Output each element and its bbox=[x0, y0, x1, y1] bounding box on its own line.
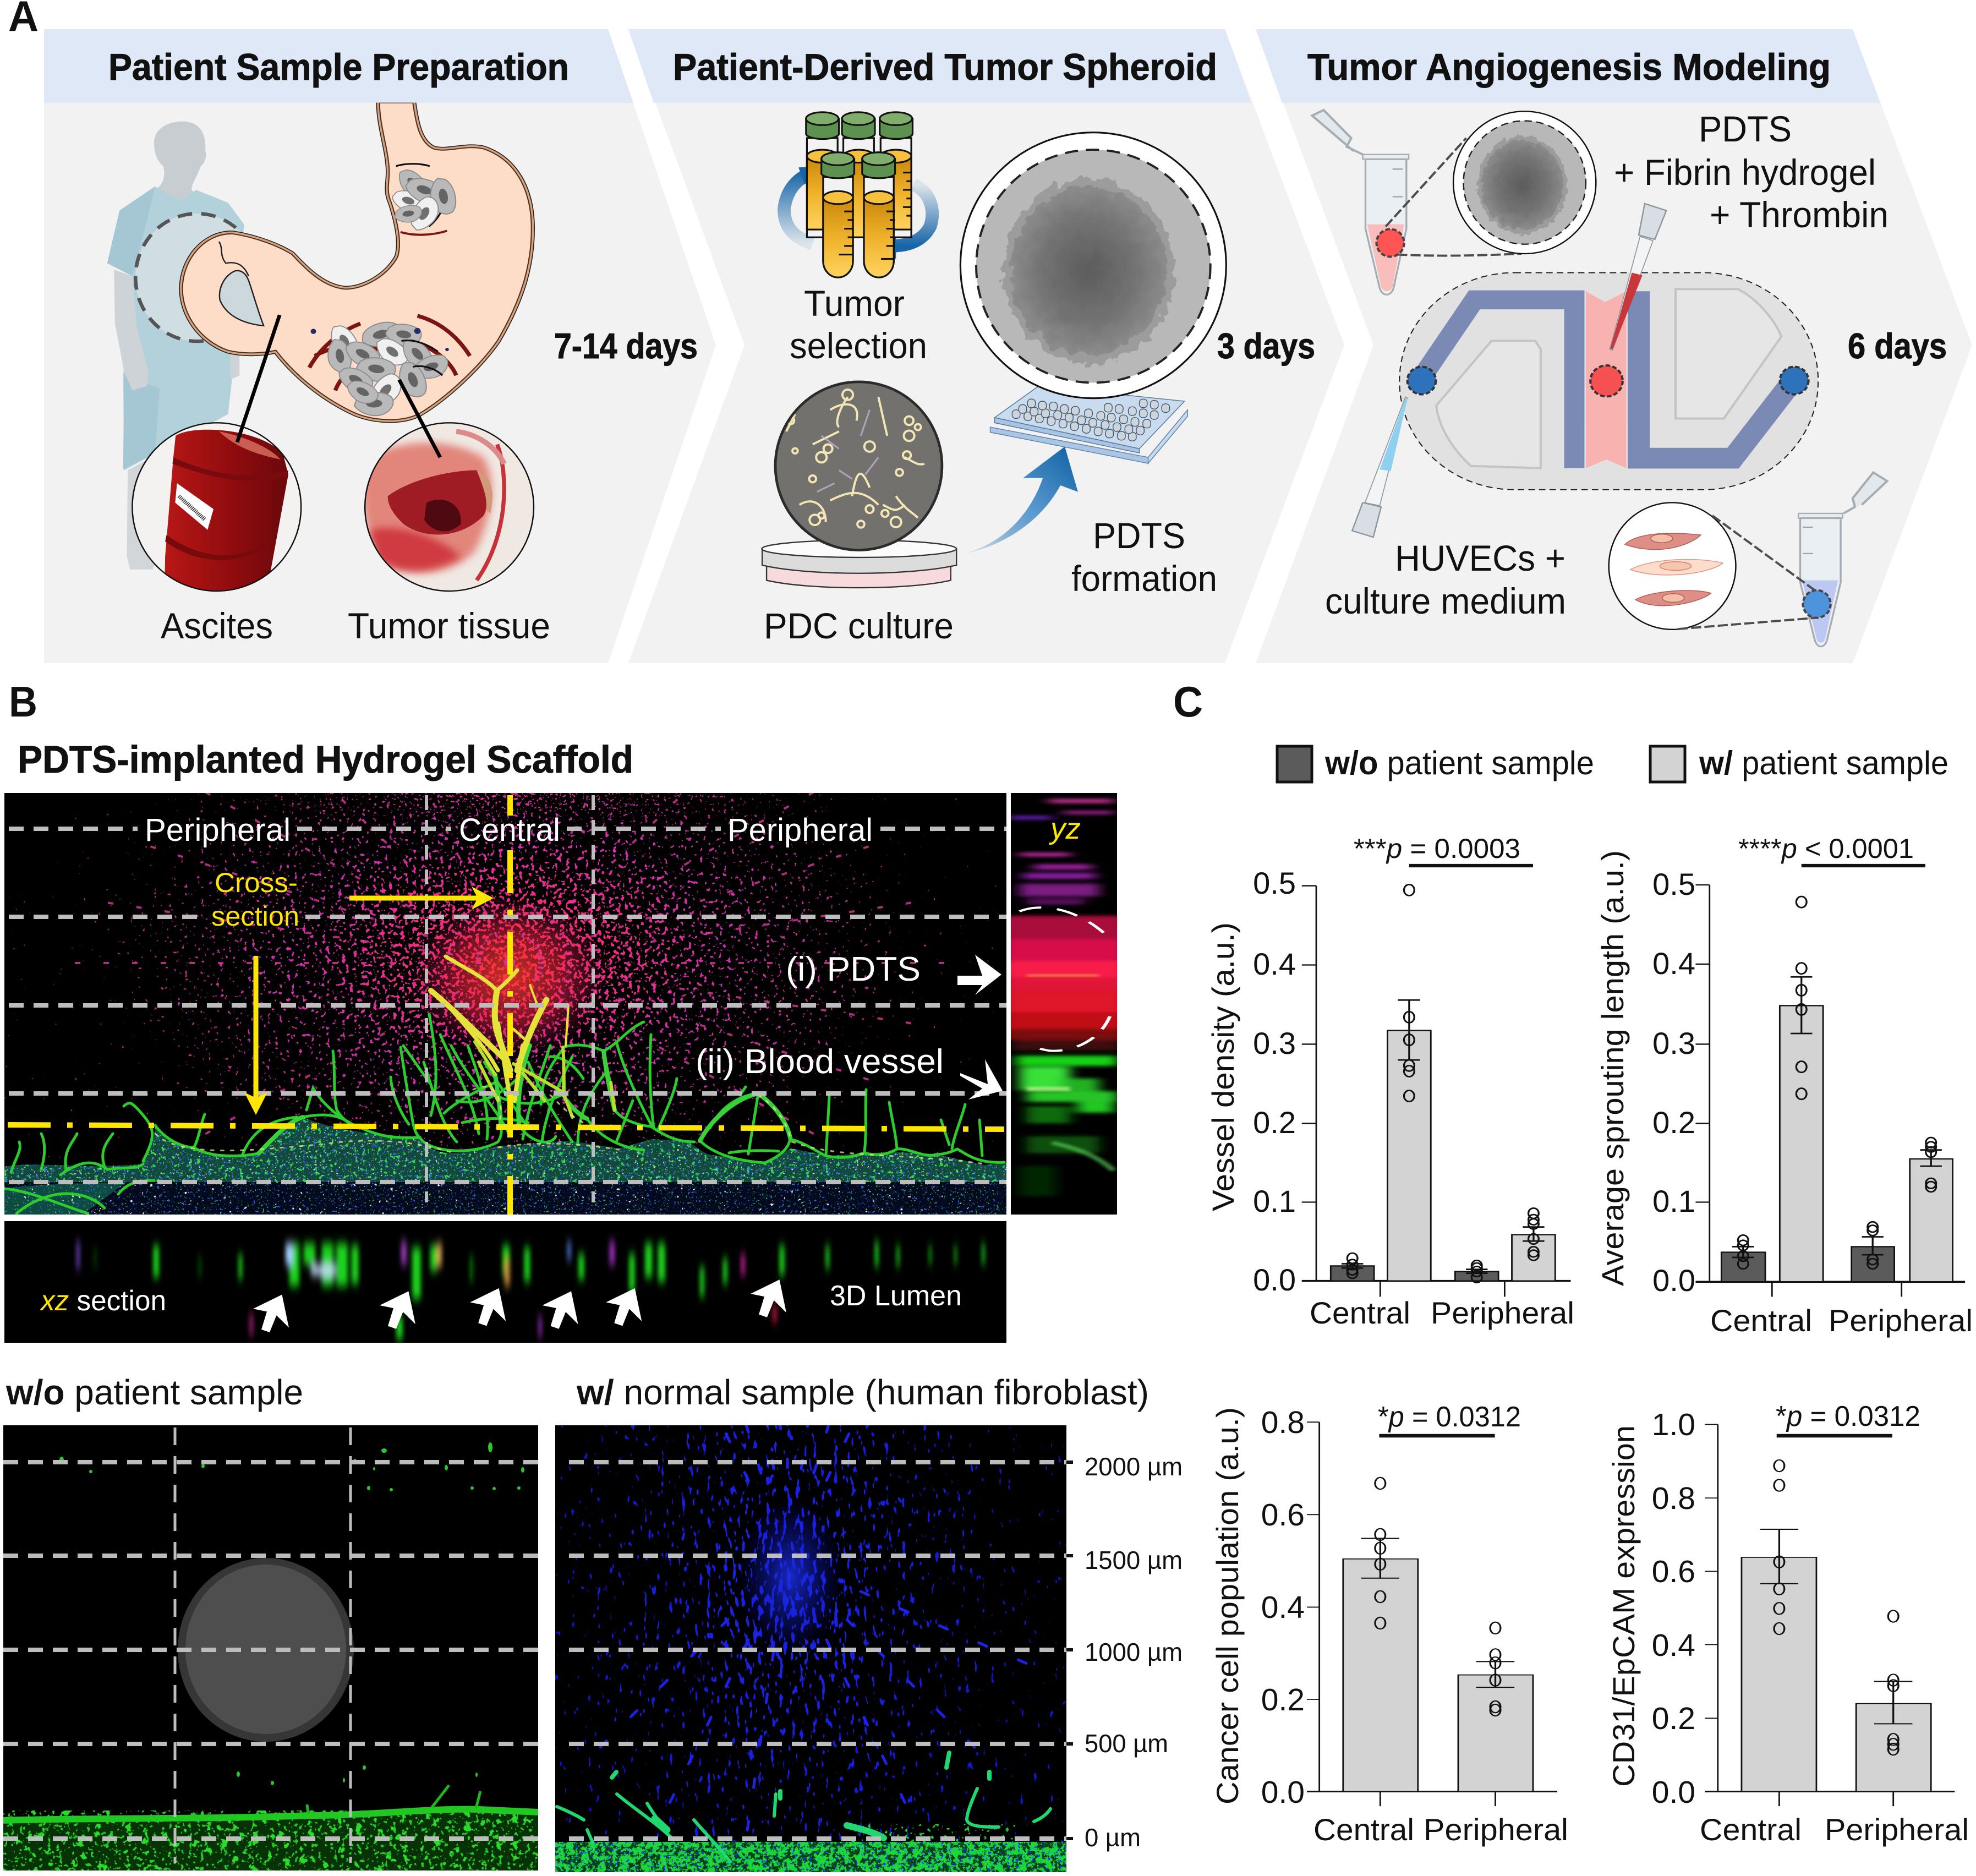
y axis tick labels: 0.6 bbox=[1652, 1554, 1695, 1589]
x labels: Peripheral bbox=[1431, 1295, 1574, 1330]
header band 2 bbox=[628, 29, 1251, 103]
legend swatch: w/o bbox=[1277, 746, 1312, 782]
callout line to tumor tissue bbox=[399, 380, 440, 457]
micrograph: main hydrogel scaffold bbox=[4, 724, 1006, 1215]
x labels: Central bbox=[1710, 1303, 1812, 1338]
y axis tick labels: 0.4 bbox=[1652, 1628, 1695, 1663]
label: formation: formation bbox=[1071, 558, 1217, 599]
label: PDC culture: PDC culture bbox=[764, 605, 954, 646]
icon: 96-well plate bbox=[990, 386, 1187, 463]
label: PDTS: PDTS bbox=[1093, 515, 1185, 556]
label: Central: Central bbox=[459, 812, 560, 848]
y axis tick labels: 0.4 bbox=[1261, 1590, 1305, 1625]
y axis tick labels: 0.3 bbox=[1253, 1026, 1296, 1060]
label: Ascites: Ascites bbox=[161, 605, 273, 646]
y axis tick labels: 0.2 bbox=[1253, 1105, 1296, 1140]
arrow: PDC to PDTS formation bbox=[960, 446, 1078, 554]
spheroid micrograph in circle bbox=[960, 133, 1226, 398]
label: + Thrombin: + Thrombin bbox=[1710, 194, 1889, 235]
scale ticks bbox=[1066, 1462, 1073, 1839]
label: (i) PDTS: (i) PDTS bbox=[786, 950, 921, 988]
scale labels bbox=[1085, 1452, 1183, 1852]
label: 3D Lumen: 3D Lumen bbox=[830, 1280, 962, 1312]
callout line to ascites bbox=[237, 315, 280, 442]
illustration: spheroid steps bbox=[762, 112, 1226, 588]
micrograph: PDC culture bbox=[775, 382, 942, 550]
grid: gray dashed guide lines bbox=[9, 795, 1006, 1202]
illustration: patient and stomach bbox=[107, 103, 534, 604]
x labels: Central bbox=[1313, 1812, 1414, 1847]
icon: stomach bbox=[183, 103, 532, 420]
panel: Patient Sample Preparation bbox=[44, 29, 716, 663]
legend text: w/o patient sample: w/o patient sample bbox=[1324, 745, 1594, 781]
y axis tick labels: 0.3 bbox=[1652, 1026, 1695, 1060]
panel label C: C bbox=[1173, 677, 1203, 726]
photo: tumor tissue bbox=[362, 423, 534, 591]
legend text: w/ patient sample: w/ patient sample bbox=[1699, 745, 1948, 781]
label: section: section bbox=[211, 901, 299, 932]
chart: average sprouting length bbox=[1595, 833, 1973, 1338]
y axis tick labels: 0.5 bbox=[1253, 866, 1296, 900]
label: Cross-: Cross- bbox=[215, 867, 298, 898]
x labels bbox=[1310, 1295, 1574, 1330]
header band 1 bbox=[44, 29, 633, 103]
placeholder spheroid shape bbox=[178, 1558, 354, 1742]
label: + Fibrin hydrogel: + Fibrin hydrogel bbox=[1614, 152, 1876, 193]
y axis title: Cancer cell population (a.u.) bbox=[1210, 1407, 1245, 1804]
heading: w/ normal sample: w/ normal sample (human fibroblast) bbox=[576, 1372, 1149, 1412]
micrograph: without patient sample bbox=[3, 1425, 538, 1870]
arrow: yellow horizontal bbox=[349, 887, 494, 910]
heading: Patient Sample Preparation: Patient Sample Preparation bbox=[108, 46, 569, 88]
arrows: lumen markers bbox=[253, 1279, 786, 1332]
significance: *p = 0.0312 bbox=[1776, 1401, 1920, 1432]
dashed magnification circle on patient bbox=[135, 214, 259, 341]
green endothelial layer bbox=[3, 1785, 538, 1870]
y axis tick labels: 0.6 bbox=[1261, 1497, 1305, 1533]
label: (ii) Blood vessel: (ii) Blood vessel bbox=[696, 1043, 944, 1081]
duration: 7-14 days: 7-14 days bbox=[554, 326, 698, 366]
y axis tick labels: 0.1 bbox=[1253, 1184, 1296, 1218]
micrograph: with normal sample bbox=[555, 1252, 1066, 1872]
x labels: Peripheral bbox=[1424, 1812, 1568, 1847]
chart: cancer cell population bbox=[1210, 1401, 1568, 1847]
icon: HUVEC inset circle bbox=[1609, 502, 1736, 630]
icon: tumor selection tubes bbox=[784, 112, 932, 277]
arrow: yellow vertical bbox=[244, 956, 267, 1115]
illustration: chip assembly bbox=[1312, 110, 1887, 647]
y axis tick labels: 0.8 bbox=[1261, 1405, 1305, 1440]
label: Tumor tissue: Tumor tissue bbox=[348, 605, 550, 646]
y axis tick labels: 0.0 bbox=[1652, 1263, 1695, 1298]
y axis tick labels bbox=[1253, 866, 1296, 1297]
scale labels: 1000 µm bbox=[1085, 1638, 1183, 1666]
x labels: Central bbox=[1310, 1295, 1410, 1330]
icon: microfluidic chip bbox=[1399, 272, 1818, 490]
y axis tick labels: 0.0 bbox=[1253, 1262, 1296, 1297]
tumor cluster lower bbox=[309, 316, 470, 415]
arrow: white to PDTS bbox=[957, 955, 1001, 995]
label: xz section: xz section bbox=[39, 1285, 166, 1317]
x labels bbox=[1710, 1303, 1973, 1338]
scale labels: 0 µm bbox=[1085, 1823, 1141, 1852]
heading: Tumor Angiogenesis Modeling: Tumor Angiogenesis Modeling bbox=[1307, 46, 1831, 88]
panel: Tumor Angiogenesis Modeling bbox=[1256, 29, 1972, 663]
radial cell streaks bbox=[589, 1252, 1031, 1864]
y axis tick labels: 0.2 bbox=[1652, 1701, 1695, 1736]
significance: ***p = 0.0003 bbox=[1354, 833, 1520, 864]
cross-section guide lines bbox=[8, 795, 1004, 1215]
label: HUVECs +: HUVECs + bbox=[1395, 538, 1566, 578]
x labels: Peripheral bbox=[1825, 1812, 1969, 1847]
tissue base layer bbox=[4, 1112, 1006, 1215]
spheroid inset circle bbox=[1453, 111, 1596, 254]
x labels: Central bbox=[1700, 1812, 1802, 1847]
y axis title: Vessel density (a.u.) bbox=[1206, 922, 1240, 1211]
significance: *p = 0.0312 bbox=[1378, 1401, 1521, 1433]
photo: ascites bottle bbox=[132, 423, 301, 604]
green-cyan endothelial layer bbox=[555, 1753, 1066, 1872]
y axis tick labels: 0.2 bbox=[1652, 1105, 1695, 1140]
scale labels: 2000 µm bbox=[1085, 1452, 1183, 1481]
label: Peripheral left: Peripheral bbox=[145, 812, 291, 848]
panel label B: B bbox=[9, 677, 37, 726]
legend bbox=[1277, 745, 1948, 782]
micrograph: xz section bbox=[4, 1221, 1006, 1343]
label: culture medium: culture medium bbox=[1325, 581, 1566, 621]
arrow: white to blood vessel bbox=[960, 1059, 1003, 1100]
duration: 6 days: 6 days bbox=[1848, 326, 1947, 366]
label: selection: selection bbox=[790, 325, 927, 366]
y axis title: Average sprouting length (a.u.) bbox=[1595, 850, 1630, 1286]
y axis tick labels bbox=[1261, 1405, 1305, 1810]
y axis tick labels: 0.1 bbox=[1652, 1184, 1695, 1218]
icon: patient figure bbox=[107, 122, 244, 570]
y axis tick labels: 0.4 bbox=[1253, 947, 1296, 981]
label: PDTS: PDTS bbox=[1699, 108, 1792, 149]
icon: culture dish bbox=[762, 540, 956, 588]
icon: microtube with spheroid bbox=[1312, 110, 1521, 294]
legend swatch: w/ bbox=[1650, 746, 1685, 782]
sparse green cells bbox=[59, 1442, 524, 1785]
micrograph: yz section bbox=[1001, 793, 1128, 1215]
y axis tick labels bbox=[1652, 867, 1695, 1298]
x labels bbox=[1700, 1812, 1969, 1847]
y axis tick labels: 0.0 bbox=[1261, 1775, 1305, 1810]
heading: w/o patient sample: w/o patient sample bbox=[6, 1372, 303, 1412]
x labels bbox=[1313, 1812, 1568, 1847]
y axis tick labels: 0.8 bbox=[1652, 1481, 1695, 1516]
label: Peripheral right: Peripheral bbox=[727, 812, 873, 848]
heading: PDTS-implanted Hydrogel Scaffold: PDTS-implanted Hydrogel Scaffold bbox=[18, 738, 633, 781]
y axis tick labels: 0.2 bbox=[1261, 1682, 1305, 1718]
scale labels: 500 µm bbox=[1085, 1729, 1168, 1758]
icon: pipette blue bbox=[1352, 397, 1408, 537]
y axis tick labels: 0.5 bbox=[1652, 867, 1695, 901]
panel: Patient-Derived Tumor Spheroid bbox=[628, 29, 1344, 663]
chart: vessel density bbox=[1206, 833, 1574, 1330]
significance: ****p < 0.0001 bbox=[1738, 833, 1914, 864]
tumor cluster upper bbox=[389, 164, 458, 235]
icon: microtube with HUVECs bbox=[1678, 472, 1887, 647]
label: Tumor selection: Tumor bbox=[804, 283, 905, 324]
y axis tick labels: 0.0 bbox=[1652, 1775, 1695, 1810]
grid: gray dashed scale lines bbox=[3, 1427, 1066, 1863]
radial cell streaks bbox=[69, 724, 950, 1138]
blood vessel sprouts bbox=[4, 956, 1004, 1213]
chart: CD31/EpCAM expression bbox=[1606, 1401, 1969, 1847]
y axis tick labels: 1.0 bbox=[1652, 1407, 1695, 1442]
icon: pipette red bbox=[1610, 204, 1666, 351]
duration: 3 days: 3 days bbox=[1217, 326, 1315, 366]
x labels: Peripheral bbox=[1829, 1303, 1973, 1338]
heading: Patient-Derived Tumor Spheroid: Patient-Derived Tumor Spheroid bbox=[673, 46, 1217, 88]
y axis title: CD31/EpCAM expression bbox=[1606, 1425, 1641, 1787]
y axis tick labels bbox=[1652, 1407, 1695, 1810]
label: yz: yz bbox=[1048, 812, 1081, 845]
header band 3 bbox=[1256, 29, 1880, 103]
y axis tick labels: 0.4 bbox=[1652, 946, 1695, 981]
scale labels: 1500 µm bbox=[1085, 1546, 1183, 1574]
